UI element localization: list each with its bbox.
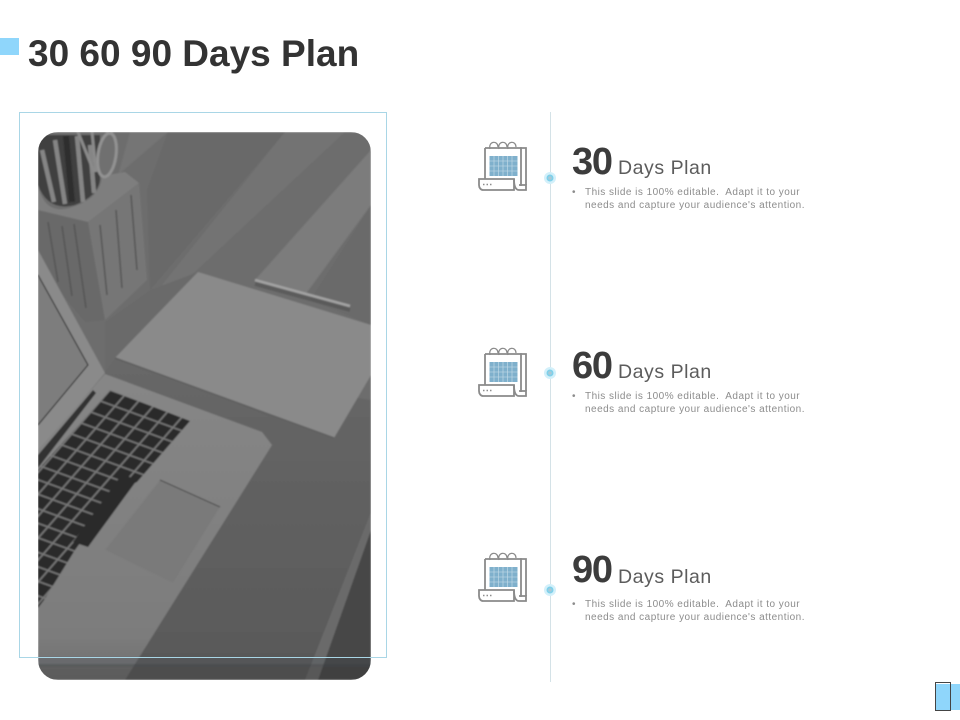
laptop base: [38, 374, 272, 680]
description 30: •: [572, 187, 576, 198]
timeline dot 90: [544, 584, 556, 596]
description 90: needs and capture your audience's attention.: [585, 612, 805, 623]
icon: calendar 30: [478, 142, 527, 191]
description 60: needs and capture your audience's attention.: [585, 404, 805, 415]
pen holder: [38, 205, 105, 322]
title: 30 60 90 Days Plan: [28, 33, 359, 74]
description 90: This slide is 100% editable. Adapt it to your: [585, 599, 800, 610]
pen: [255, 284, 350, 310]
heading 90 days plan: Days Plan: [618, 566, 712, 588]
corner accent: [935, 682, 960, 711]
trackpad: [105, 480, 220, 583]
bottom band: [38, 664, 324, 680]
description 90: [572, 599, 805, 623]
keyboard: [38, 390, 190, 608]
photo: laptop on wooden desk: [38, 132, 371, 680]
title accent square: [0, 38, 19, 55]
number 60: 60: [572, 345, 612, 387]
pencils and scissors: [38, 135, 100, 206]
description 30: [572, 187, 805, 211]
icon: calendar 90: [478, 552, 527, 602]
number 90: 90: [572, 549, 612, 591]
icon: calendar 60: [478, 348, 527, 397]
paper: [115, 272, 371, 438]
description 60: •: [572, 391, 576, 402]
heading 30 days plan: Days Plan: [618, 157, 712, 179]
description 90: •: [572, 599, 576, 610]
timeline dot 60: [544, 367, 556, 379]
laptop screen: [38, 250, 105, 452]
number 30: 30: [572, 141, 612, 183]
photo frame outline: [19, 112, 387, 658]
lower desk: [126, 399, 370, 680]
description 30: This slide is 100% editable. Adapt it to your: [585, 187, 800, 198]
description 30: needs and capture your audience's attention.: [585, 200, 805, 211]
description 60: [572, 391, 805, 415]
description 60: This slide is 100% editable. Adapt it to your: [585, 391, 800, 402]
wood planks: [118, 132, 168, 175]
timeline dot 30: [544, 172, 556, 184]
heading 60 days plan: Days Plan: [618, 361, 712, 383]
timeline vertical line: [550, 112, 551, 682]
